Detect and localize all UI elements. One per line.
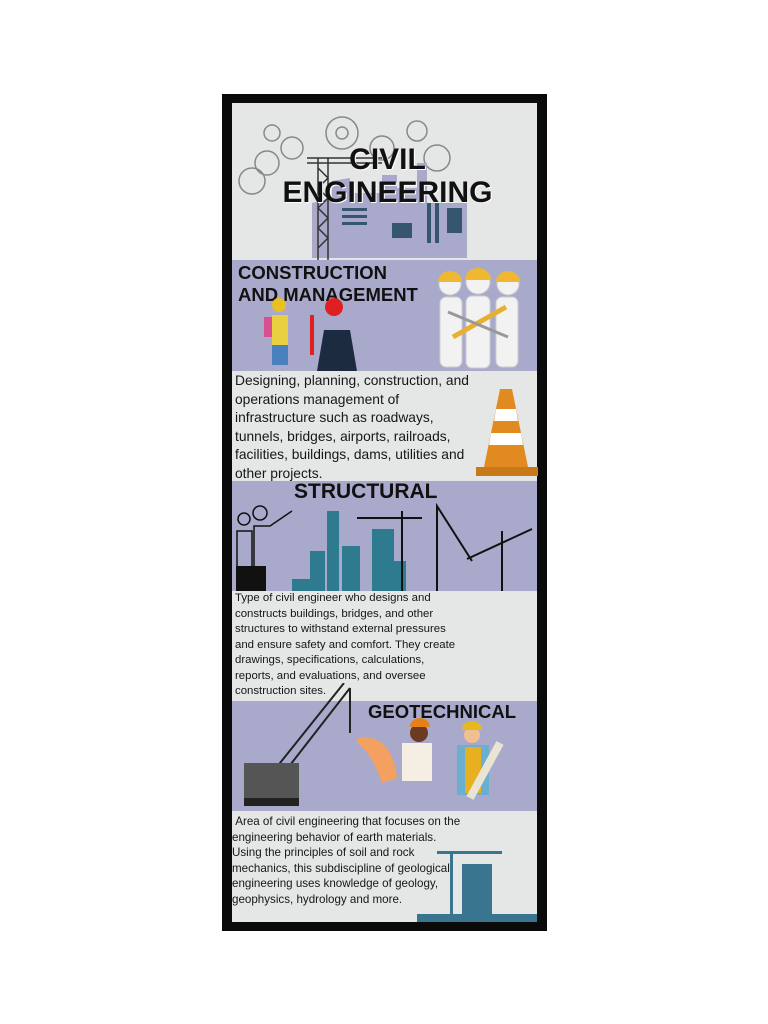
title area xyxy=(232,103,537,260)
text block: structural: Type of civil engineer who designs and xyxy=(235,592,431,604)
heading: AND MANAGEMENT xyxy=(238,284,418,305)
text block: construction and management xyxy=(232,371,537,481)
text block: construction and management: other projects. xyxy=(235,466,322,480)
panel: structural header xyxy=(232,481,537,591)
illustration: construction silhouette xyxy=(417,851,537,922)
panel: construction and management header xyxy=(232,260,537,371)
text block: construction and management: operations management of xyxy=(235,392,399,406)
text block: construction and management: facilities, buildings, dams, utilities and xyxy=(235,447,464,462)
illustration: crane and workers xyxy=(244,683,504,806)
text block: construction and management: infrastructure such as roadways, xyxy=(235,410,434,425)
heading: GEOTECHNICAL xyxy=(368,701,516,722)
icon: workers xyxy=(264,298,357,371)
frame xyxy=(222,94,547,931)
text block: geotechnical: engineering behavior of earth materials. xyxy=(232,831,436,844)
icon: traffic cone xyxy=(476,389,538,476)
illustration: engineers, city, cranes xyxy=(236,502,532,591)
text block: geotechnical: Area of civil engineering that focuses on the xyxy=(235,815,460,828)
text block: geotechnical: mechanics, this subdiscipline of geological xyxy=(232,862,450,875)
text block: structural: constructs buildings, bridges, and other xyxy=(235,608,433,620)
title text: CIVIL xyxy=(349,143,426,176)
text block: structural: and ensure safety and comfort. They create xyxy=(235,638,455,650)
text block: geotechnical: engineering uses knowledge of geology, xyxy=(232,877,438,890)
icon: 3D figures with hard hats xyxy=(438,268,520,368)
text block: structural: drawings, specifications, calculations, xyxy=(235,654,424,666)
heading: CONSTRUCTION xyxy=(238,262,387,283)
title text xyxy=(282,143,493,209)
text block: structural: structures to withstand external pressures xyxy=(235,623,446,635)
text block: structural xyxy=(232,591,537,701)
text block: structural: reports, and evaluations, and oversee xyxy=(235,670,426,682)
text block: construction and management: tunnels, bridges, airports, railroads, xyxy=(235,428,450,444)
text block: geotechnical xyxy=(232,811,537,922)
title text: ENGINEERING xyxy=(282,176,493,209)
text block: geotechnical: Using the principles of soil and rock xyxy=(232,846,414,859)
text block: construction and management: Designing, planning, construction, and xyxy=(235,373,469,388)
illustration: gears and city xyxy=(238,116,467,260)
text block: structural: construction sites. xyxy=(235,685,326,697)
panel: geotechnical header xyxy=(232,701,537,811)
text block: geotechnical: geophysics, hydrology and more. xyxy=(232,893,402,906)
heading: STRUCTURAL xyxy=(294,480,437,503)
heading xyxy=(238,262,418,305)
